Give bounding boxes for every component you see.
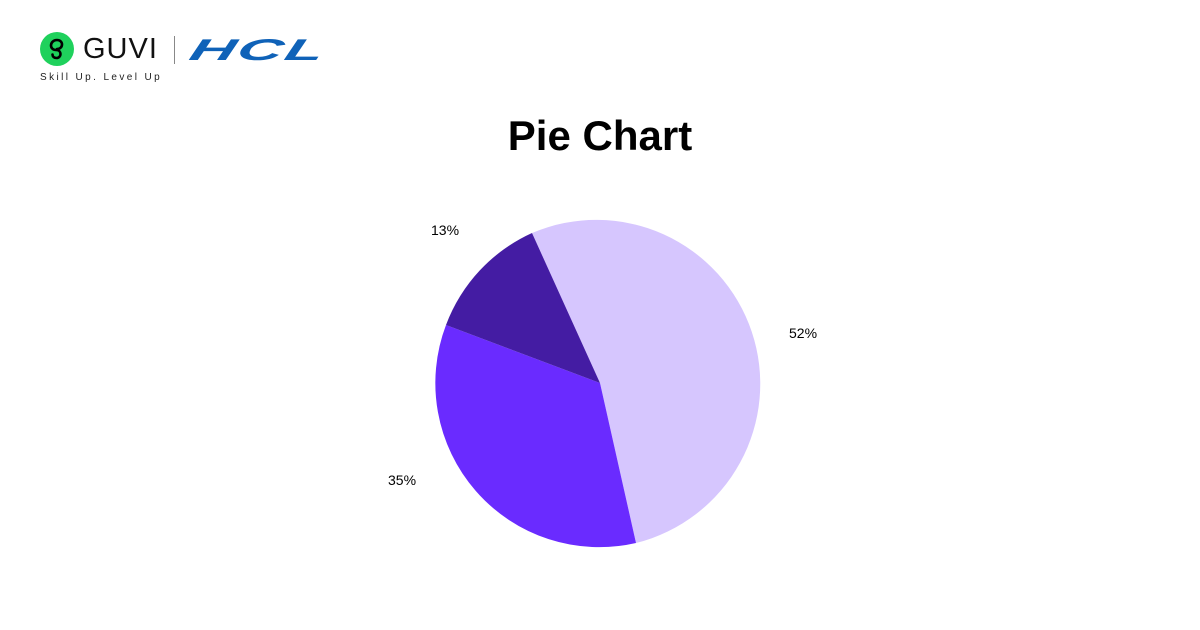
slice 52%	[532, 220, 760, 543]
tagline: Skill Up. Level Up	[40, 72, 162, 83]
label 35%: 35%	[388, 472, 416, 488]
icon: guvi	[40, 32, 74, 66]
slice 13%	[446, 233, 600, 383]
slice 35%	[435, 325, 636, 547]
title: Pie Chart	[508, 112, 692, 159]
HCL logo: HCL	[186, 34, 330, 67]
label 52%: 52%	[789, 325, 817, 341]
logo	[40, 32, 330, 83]
label 13%: 13%	[431, 222, 459, 238]
brand text: GUVI	[83, 33, 158, 65]
